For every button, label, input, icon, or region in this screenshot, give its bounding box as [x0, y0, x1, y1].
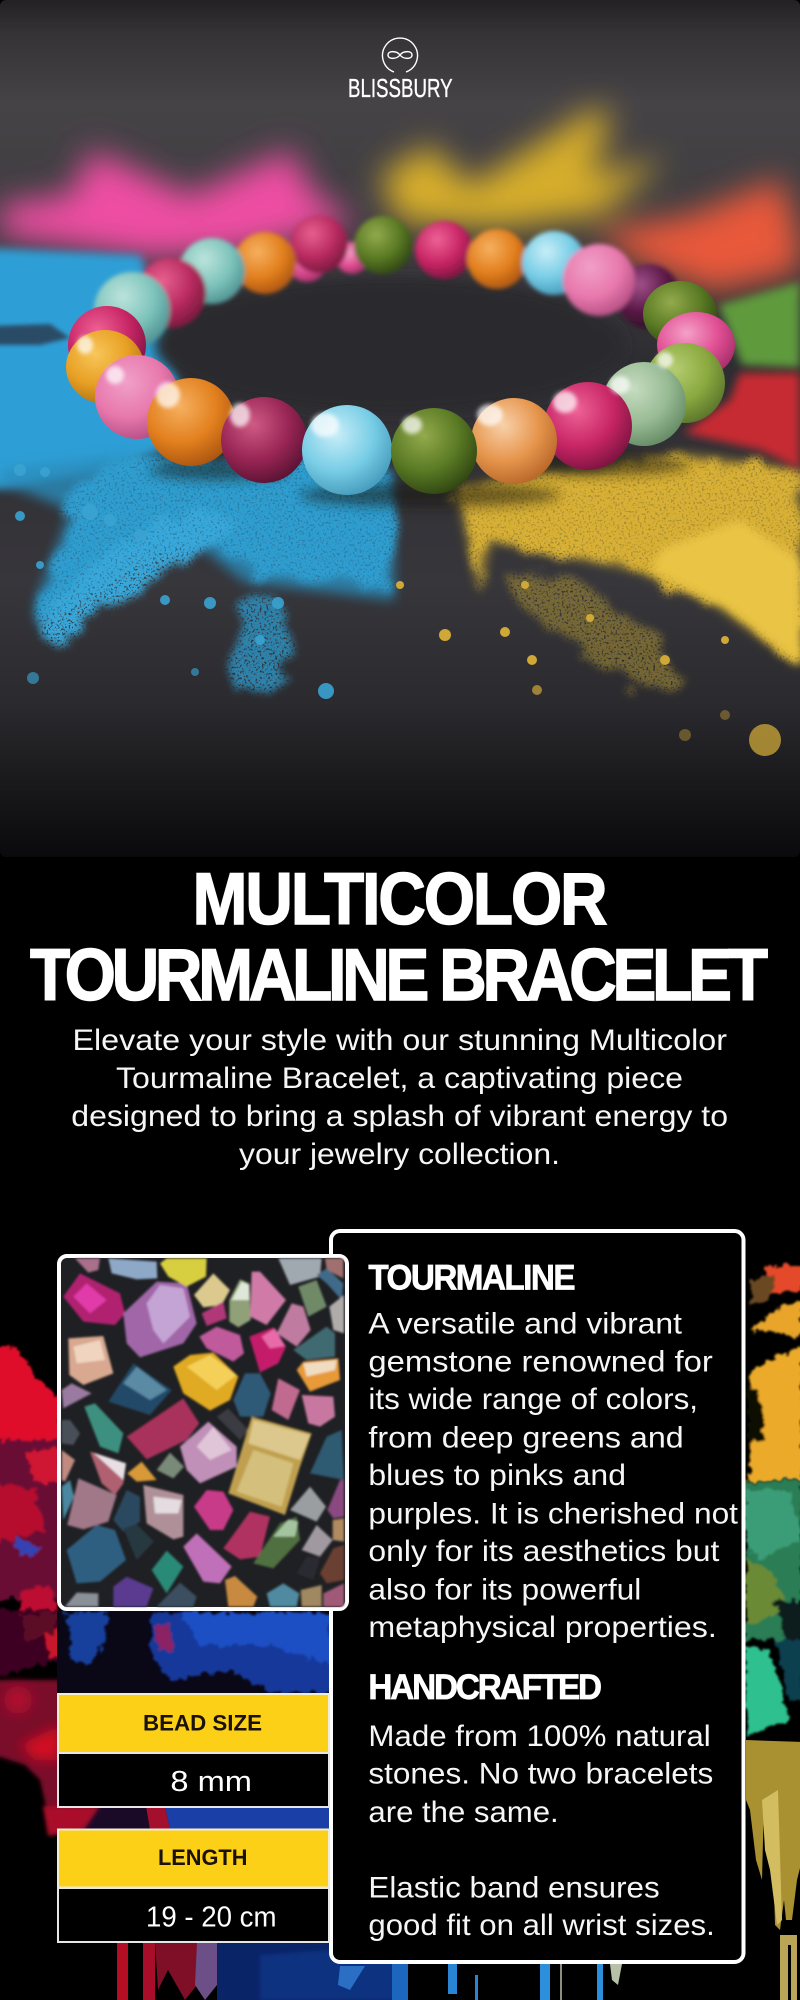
- title: MULTICOLOR: [193, 858, 608, 940]
- paint splash: behind spec rows: [43, 1611, 335, 1836]
- spec table: length: 19 - 20 cm: [146, 1902, 276, 1934]
- spec table: bead size: 8 mm: [170, 1766, 252, 1798]
- green powder: [719, 282, 800, 368]
- text block: tourmaline description: from deep greens and: [368, 1421, 684, 1454]
- hero photo: bracelet on coloured powder: [0, 0, 800, 857]
- title: TOURMALINE BRACELET: [30, 934, 768, 1016]
- photo: tourmaline gemstones: [59, 1256, 347, 1609]
- blurred powders behind bracelet: [0, 105, 800, 292]
- text block: tourmaline description: purples. It is cherished not: [368, 1498, 738, 1530]
- blue powder, lower: [0, 455, 394, 695]
- spec table: bead size: [58, 1694, 329, 1807]
- title: [30, 858, 768, 1016]
- yellow drips: [746, 1740, 800, 1930]
- dark centre of bracelet: [146, 277, 610, 380]
- bracelet beads: [66, 215, 735, 495]
- text block: tourmaline description: also for its powerful: [368, 1574, 641, 1606]
- orange paint: [748, 1266, 800, 1482]
- text block: tourmaline description: its wide range of colors,: [368, 1383, 698, 1416]
- red powder: [684, 373, 800, 469]
- green paint: [746, 1480, 800, 1735]
- paint splash: right side: [746, 1266, 800, 2000]
- blue powder, upper left: [0, 248, 190, 490]
- text block: handcrafted description: Elastic band ensures: [368, 1872, 660, 1904]
- yellow powder: [457, 455, 800, 690]
- heading: Tourmaline: TOURMALINE: [368, 1259, 576, 1298]
- text block: tourmaline description: metaphysical properties.: [368, 1611, 717, 1644]
- text block: handcrafted description: [368, 1720, 715, 1942]
- paint splash: left side: [0, 1346, 68, 1830]
- intro paragraph: [71, 1024, 728, 1171]
- intro paragraph: your jewelry collection.: [239, 1138, 560, 1171]
- panel: text card: [331, 1231, 744, 1962]
- text block: tourmaline description: blues to pinks and: [368, 1459, 626, 1492]
- intro paragraph: designed to bring a splash of vibrant energy to: [71, 1100, 728, 1133]
- text block: tourmaline description: A versatile and vibrant: [368, 1308, 682, 1341]
- powder specks: [14, 464, 334, 699]
- back beads: [94, 215, 680, 348]
- brand name: BLISSBURY: [348, 73, 453, 103]
- spec table: bead size: BEAD SIZE: [143, 1711, 262, 1736]
- text block: tourmaline description: only for its aesthetics but: [368, 1535, 719, 1568]
- intro paragraph: Tourmaline Bracelet, a captivating piece: [116, 1062, 683, 1095]
- paint splash: bottom drips: [117, 1942, 622, 2000]
- spec table: length: [58, 1830, 329, 1942]
- logo: Blissbury: [348, 38, 453, 103]
- icon: infinity ring: [382, 38, 418, 72]
- bead shadows: [150, 455, 690, 507]
- heading: Handcrafted: HANDCRAFTED: [368, 1668, 602, 1707]
- intro paragraph: Elevate your style with our stunning Multicolor: [72, 1024, 727, 1057]
- text block: tourmaline description: [368, 1308, 738, 1644]
- text block: handcrafted description: stones. No two bracelets: [368, 1758, 713, 1791]
- text block: handcrafted description: are the same.: [368, 1796, 559, 1829]
- spec table: length: LENGTH: [158, 1845, 247, 1870]
- text block: handcrafted description: good fit on all wrist sizes.: [368, 1909, 715, 1942]
- text block: handcrafted description: Made from 100% natural: [368, 1720, 711, 1753]
- text block: tourmaline description: gemstone renowned for: [368, 1345, 713, 1378]
